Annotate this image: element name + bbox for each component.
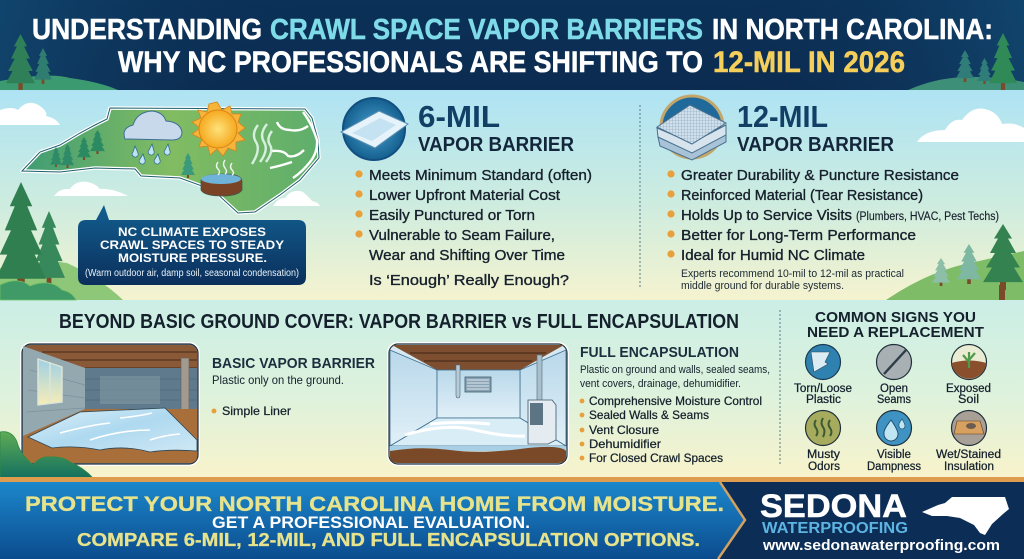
icon: torn plastic: [806, 344, 840, 380]
list: 12-mil points: Greater Durability & Puncture Resistance: [681, 168, 959, 184]
labels: signs: Musty: [807, 449, 840, 461]
heading: common signs: [807, 309, 984, 341]
callout: NC climate: MOISTURE PRESSURE.: [118, 251, 267, 265]
note: experts recommendation: middle ground for durable systems.: [681, 280, 844, 292]
list: 6-mil points: Easily Punctured or Torn: [369, 208, 535, 224]
labels: signs: Open: [880, 383, 908, 395]
background: upper panel: [0, 88, 1024, 300]
title: UNDERSTANDING: [32, 14, 262, 46]
callout: NC climate: NC CLIMATE EXPOSES: [118, 225, 266, 239]
list: 6-mil points: Wear and Shifting Over Time: [369, 248, 565, 264]
note: experts recommendation: Experts recommend 10-mil to 12-mil as practical: [681, 268, 904, 280]
text: full encapsulation: For Closed Crawl Spaces: [589, 451, 723, 465]
call to action: [25, 493, 724, 550]
icon: rain cloud: [124, 111, 182, 164]
panel: common signs: [794, 309, 1001, 473]
labels: signs: Dampness: [867, 461, 921, 473]
labels: signs: Torn/Loose: [794, 383, 852, 395]
icon: wet insulation: [952, 410, 986, 446]
list: 6-mil points: Vulnerable to Seam Failure,: [369, 228, 555, 244]
icon: thin plastic sheet: [341, 98, 408, 160]
logo: Sedona Waterproofing: WATERPROOFING: [762, 520, 908, 537]
icon: exposed soil: [952, 344, 986, 380]
list: 6-mil points: Is ‘Enough’ Really Enough?: [369, 273, 569, 289]
icon: open seams: [876, 344, 912, 380]
heading: 6-mil: [418, 99, 575, 156]
labels: signs: Odors: [808, 461, 840, 473]
title: CRAWL SPACE VAPOR BARRIERS: [270, 14, 703, 46]
call to action: GET A PROFESSIONAL EVALUATION.: [212, 514, 530, 532]
text: full encapsulation: Comprehensive Moisture Control: [589, 394, 762, 408]
panel: 12-mil: [657, 96, 999, 292]
background: lower panel: [0, 300, 1024, 478]
title: [32, 14, 993, 79]
title: WHY NC PROFESSIONALS ARE SHIFTING TO: [118, 46, 703, 79]
icon: white NC map: [922, 497, 1009, 535]
icon: humidity waves: [252, 124, 272, 164]
list: 12-mil points: Ideal for Humid NC Climate: [681, 248, 865, 264]
icon: thick layered sheet: [657, 96, 726, 160]
bottom-left bush: [0, 432, 93, 478]
list: 12-mil points: (Plumbers, HVAC, Pest Techs): [856, 211, 999, 223]
panel: 6-mil: [341, 98, 592, 289]
icon: musty odors: [806, 410, 840, 446]
labels: signs: Wet/Stained: [936, 449, 1001, 461]
heading: common signs: NEED A REPLACEMENT: [807, 324, 984, 341]
labels: signs: Soil: [958, 394, 979, 406]
illustration: basic vapor barrier: [22, 344, 198, 464]
text: full encapsulation: Vent Closure: [589, 423, 659, 437]
text: full encapsulation: [580, 344, 770, 465]
text: basic vapor barrier: [212, 355, 375, 418]
right hill and trees: [886, 224, 1024, 300]
heading: 12-mil: VAPOR BARRIER: [737, 134, 895, 156]
heading: 12-mil: 12-MIL: [737, 99, 828, 134]
note: experts recommendation: [681, 268, 904, 292]
icon: wet soil: [201, 160, 242, 196]
logo: Sedona Waterproofing: [760, 488, 1000, 554]
title: IN NORTH CAROLINA:: [712, 14, 993, 46]
callout: NC climate: (Warm outdoor air, damp soil, seasonal condensation): [85, 268, 299, 279]
labels: signs: Insulation: [944, 461, 994, 473]
footer banner: [0, 477, 1024, 559]
labels: signs: Visible: [877, 449, 911, 461]
header banner: [0, 0, 1024, 90]
text: full encapsulation: vent covers, drainage, dehumidifier.: [580, 378, 741, 390]
text: full encapsulation: Plastic on ground and walls, sealed seams,: [580, 364, 770, 376]
section heading: BEYOND BASIC GROUND COVER: VAPOR BARRIER vs FULL ENCAPSULATION: [59, 311, 739, 333]
text: basic vapor barrier: Plastic only on the ground.: [212, 373, 344, 387]
icon: visible dampness: [876, 410, 912, 446]
heading: common signs: COMMON SIGNS YOU: [815, 309, 976, 326]
logo: Sedona Waterproofing: SEDONA: [760, 488, 907, 524]
logo: Sedona Waterproofing: www.sedonawaterproofing.com: [762, 538, 1000, 554]
heading: 6-mil: VAPOR BARRIER: [418, 134, 575, 156]
icon: sun: [192, 102, 245, 156]
text: full encapsulation: Sealed Walls & Seams: [589, 408, 709, 422]
labels: signs: [794, 383, 1001, 473]
list: 6-mil points: [355, 168, 592, 289]
illustration: full encapsulation: [389, 344, 567, 464]
title: 12-MIL IN 2026: [713, 46, 905, 79]
text: full encapsulation: Dehumidifier: [589, 437, 661, 451]
call to action: COMPARE 6-MIL, 12-MIL, AND FULL ENCAPSULATION OPTIONS.: [77, 529, 700, 550]
callout: NC climate: [78, 205, 306, 285]
list: 12-mil points: Reinforced Material (Tear Resistance): [681, 188, 923, 204]
call to action: PROTECT YOUR NORTH CAROLINA HOME FROM MOISTURE.: [25, 493, 724, 516]
labels: signs: Seams: [877, 394, 911, 406]
clouds: [0, 103, 1024, 206]
list: 6-mil points: Lower Upfront Material Cost: [369, 188, 560, 204]
labels: signs: Plastic: [806, 394, 841, 406]
text: full encapsulation: FULL ENCAPSULATION: [580, 344, 739, 361]
labels: signs: Exposed: [946, 383, 991, 395]
list: 12-mil points: [667, 168, 999, 264]
list: 12-mil points: Holds Up to Service Visits: [681, 208, 852, 224]
heading: 12-mil: [737, 99, 895, 156]
NC climate map: [22, 102, 319, 213]
bottom-left hill and trees: [0, 182, 123, 300]
callout: NC climate: CRAWL SPACES TO STEADY: [100, 238, 284, 252]
heading: 6-mil: 6-MIL: [418, 99, 500, 134]
text: basic vapor barrier: Simple Liner: [222, 404, 291, 418]
text: basic vapor barrier: BASIC VAPOR BARRIER: [212, 355, 375, 372]
list: 6-mil points: Meets Minimum Standard (often): [369, 168, 592, 184]
list: 12-mil points: Better for Long-Term Performance: [681, 228, 916, 244]
